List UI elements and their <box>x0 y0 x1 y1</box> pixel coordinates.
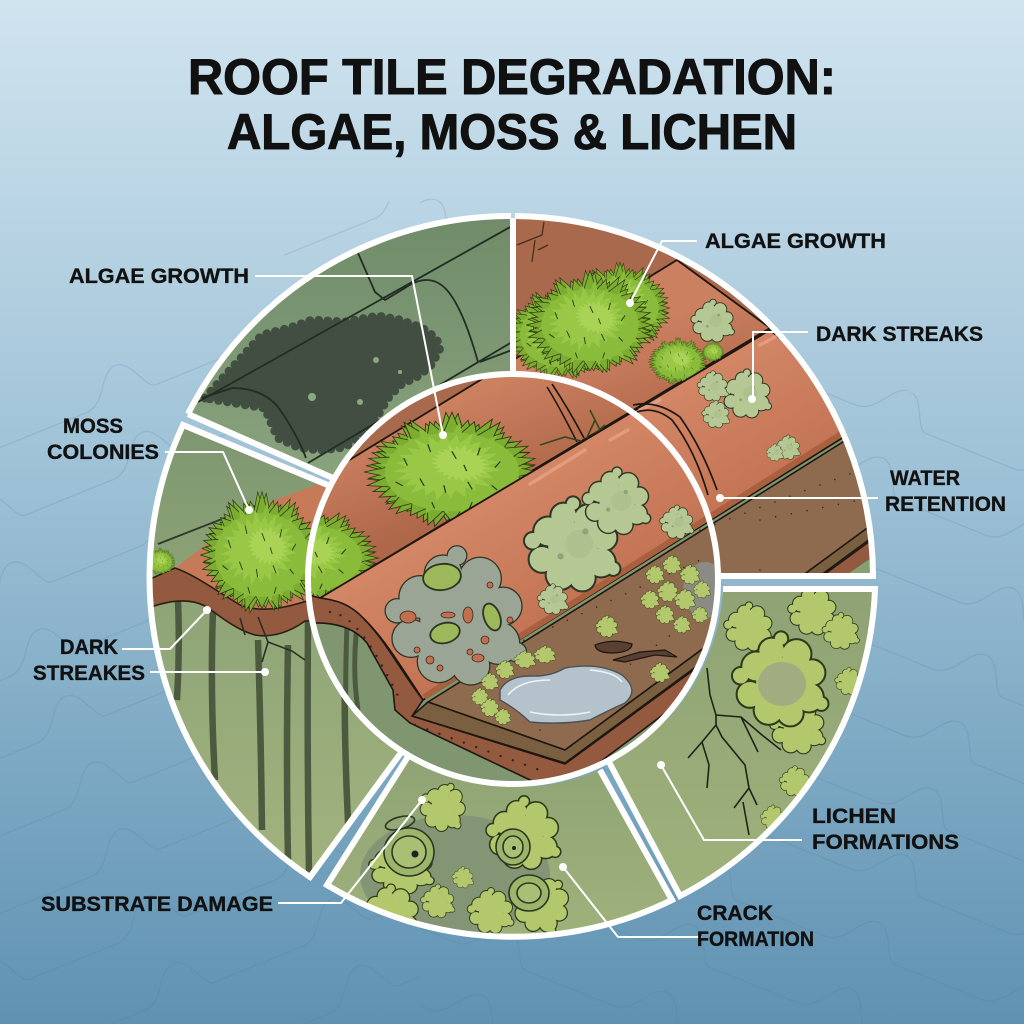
root lines <box>240 617 305 662</box>
round apothecia <box>384 813 549 911</box>
white segment frame <box>150 216 875 937</box>
dark algae stain <box>205 316 440 450</box>
curved brown tile edge <box>152 567 310 637</box>
label: dark streakes left: STREAKES <box>33 662 145 685</box>
panel: left moss and dark streaks <box>152 428 398 873</box>
apothecia centres <box>412 846 516 858</box>
spots on stain <box>308 357 402 405</box>
label: substrate damage: SUBSTRATE DAMAGE <box>41 893 273 916</box>
water puddle <box>500 666 632 723</box>
background roof tile pattern left <box>0 185 420 1024</box>
label: crack formation <box>697 902 814 951</box>
panel: top-left dark algae tile <box>192 219 510 475</box>
label: algae growth right: ALGAE GROWTH <box>705 230 886 253</box>
back tile with soil <box>352 219 771 458</box>
label: moss colonies: MOSS <box>63 415 123 438</box>
grey patch <box>360 815 550 935</box>
upper tile joint <box>547 384 584 442</box>
label: lichen formations: LICHEN <box>812 805 896 828</box>
highlights <box>530 337 775 484</box>
lichen cluster <box>724 586 862 829</box>
label: dark streaks right: DARK STREAKS <box>816 323 983 346</box>
tile lip <box>424 422 860 697</box>
back tile line <box>158 501 268 544</box>
front brown band <box>312 541 870 780</box>
label: moss colonies: COLONIES <box>47 441 159 464</box>
upper tile <box>320 259 770 566</box>
label: lichen formations: FORMATIONS <box>812 831 959 854</box>
label: crack formation: CRACK <box>697 902 773 925</box>
tile outlines <box>198 226 512 463</box>
panel: right-bottom lichen and cracks <box>612 590 872 892</box>
label: crack formation: FORMATION <box>697 928 814 951</box>
soil cracks <box>517 222 548 262</box>
dark streaks <box>177 600 350 875</box>
moss tuft <box>200 490 312 614</box>
title: ROOF TILE DEGRADATION: <box>188 49 836 105</box>
title: ALGAE, MOSS & LICHEN <box>227 104 797 160</box>
label: dark streakes left <box>33 636 145 685</box>
moss tuft left <box>311 512 380 597</box>
grey lichen patch <box>386 546 526 684</box>
stipple on brown edge <box>330 470 860 772</box>
title <box>188 49 836 160</box>
main tile <box>320 330 863 700</box>
moss tuft top right <box>516 262 671 381</box>
background roof tile pattern right <box>420 185 1024 1024</box>
leader lines <box>122 241 878 937</box>
tile joint arc <box>633 404 717 495</box>
cracks <box>688 668 781 835</box>
substrate sides <box>412 515 885 763</box>
green apothecia <box>421 561 504 647</box>
substrate <box>428 425 885 750</box>
leader dots <box>203 299 756 871</box>
panel: central magnified tile and top-right tile <box>311 219 870 781</box>
label: lichen formations <box>812 805 959 854</box>
lichen patches <box>366 782 570 934</box>
label: dark streakes left: DARK <box>60 636 118 659</box>
moss tuft centre <box>364 411 537 528</box>
pale lichen patches <box>525 300 800 614</box>
terracotta tile surface <box>176 484 326 608</box>
small moss edge <box>152 548 176 575</box>
small moss tuft <box>647 335 724 386</box>
label: water retention: WATER <box>890 467 960 490</box>
green base <box>316 439 868 781</box>
crack and oval <box>595 641 677 662</box>
label: algae growth left: ALGAE GROWTH <box>69 265 249 288</box>
label: moss colonies <box>47 415 159 464</box>
lichen on substrate <box>471 555 727 724</box>
label: water retention <box>885 467 1006 516</box>
roots <box>540 410 605 445</box>
lower right green sliver <box>825 548 885 590</box>
lower streaks <box>343 628 360 710</box>
panel: bottom lichen detail <box>331 760 668 934</box>
puddle highlights <box>508 670 622 715</box>
label: water retention: RETENTION <box>885 493 1006 516</box>
